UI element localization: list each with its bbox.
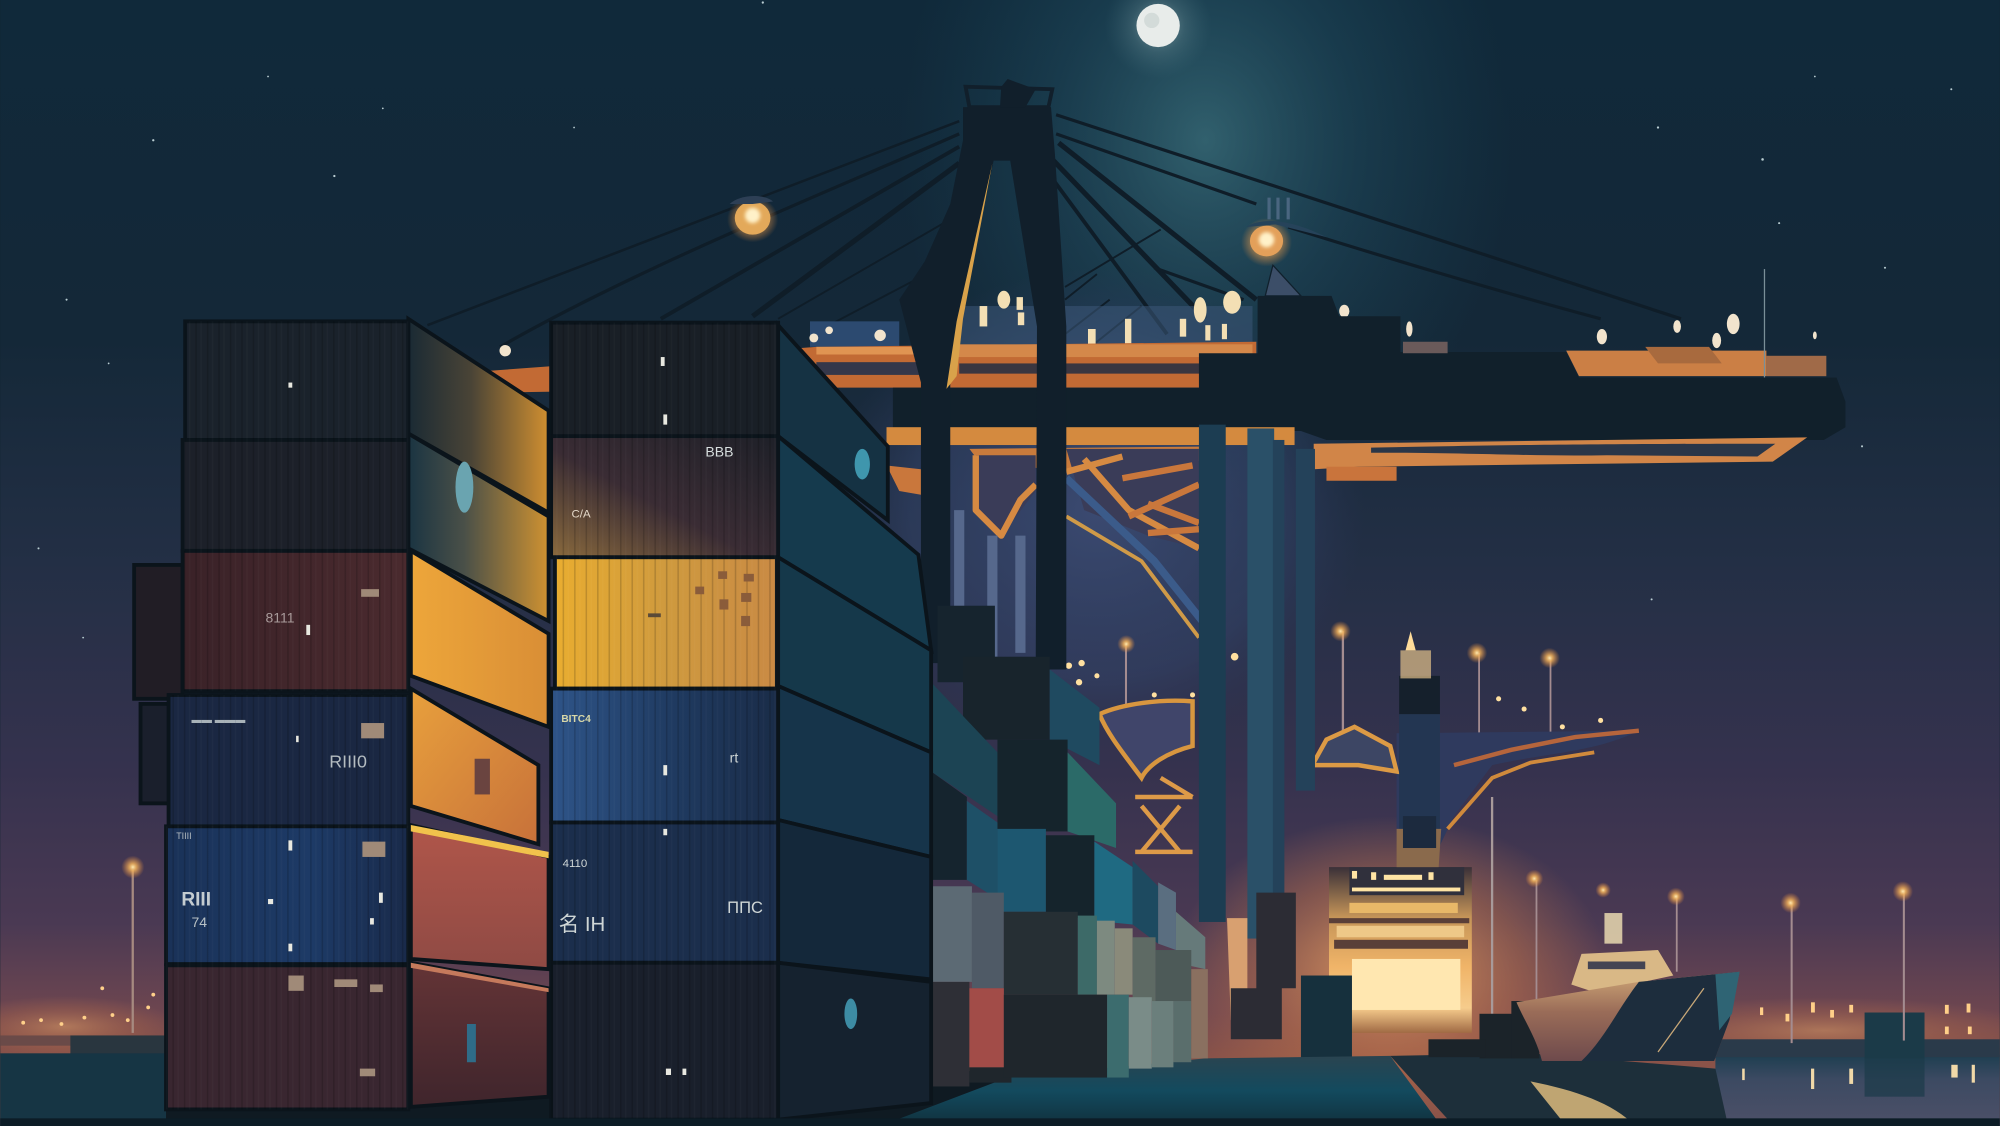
back container stack xyxy=(931,606,1208,1086)
crane orange girder xyxy=(887,427,1807,495)
container markings: 4110 xyxy=(563,858,587,870)
crane A-frame and legs xyxy=(899,79,1066,669)
left container stack side panels xyxy=(408,319,549,1107)
distant lights behind containers xyxy=(1066,653,1603,729)
right water and quay xyxy=(1715,1002,2000,1126)
container markings: BBB xyxy=(705,444,733,460)
stars xyxy=(37,1,1952,638)
moon glow xyxy=(899,0,1511,510)
container markings: 74 xyxy=(192,914,207,930)
container markings: rt xyxy=(730,750,738,766)
small black box on quay xyxy=(1301,976,1352,1058)
distant crane boom xyxy=(1099,631,1639,852)
ship vessel right xyxy=(1516,913,1740,1061)
crane trolley deck orange xyxy=(485,269,1826,393)
stack bright side edge accents xyxy=(411,825,549,992)
hanging crane lamps xyxy=(727,196,1326,267)
left stack front faces xyxy=(134,321,408,1109)
middle container stack side panels xyxy=(778,325,931,1120)
container markings: 名 IH xyxy=(559,913,605,936)
container side logos xyxy=(455,449,870,1062)
ground quay xyxy=(880,1053,1728,1126)
container corrugation ribs xyxy=(166,321,778,1120)
container markings: ΠΠC xyxy=(727,898,763,917)
container markings: RIII xyxy=(181,889,211,910)
middle stack front faces xyxy=(551,323,778,1120)
far quay left with lights xyxy=(0,856,166,1126)
street lamps right xyxy=(1117,621,1913,1043)
container markings: C/A xyxy=(572,509,591,521)
bottom foreground edge xyxy=(0,1118,2000,1126)
dark quay base under the stacks xyxy=(166,1071,1020,1126)
container markings: TIIII xyxy=(176,831,192,841)
crane machine house lights xyxy=(499,291,1817,356)
dockside machinery silhouettes xyxy=(1428,1001,1539,1058)
container markings xyxy=(176,357,763,1076)
container markings: BITC4 xyxy=(561,714,591,725)
large ship superstructure at dock xyxy=(1329,816,1472,1033)
crane front legs xyxy=(1199,425,1315,1039)
dock glow behind crane xyxy=(1173,816,1607,1122)
cables xyxy=(427,115,1681,347)
container markings: 8111 xyxy=(265,609,295,625)
crane lattice xyxy=(959,449,1205,657)
container markings: ▬▬ ▬▬▬ xyxy=(192,715,246,726)
crane boom main dark xyxy=(893,265,1845,440)
blue haze behind crane xyxy=(829,268,1365,752)
moon xyxy=(1105,0,1212,79)
container markings: RIII0 xyxy=(329,752,367,772)
